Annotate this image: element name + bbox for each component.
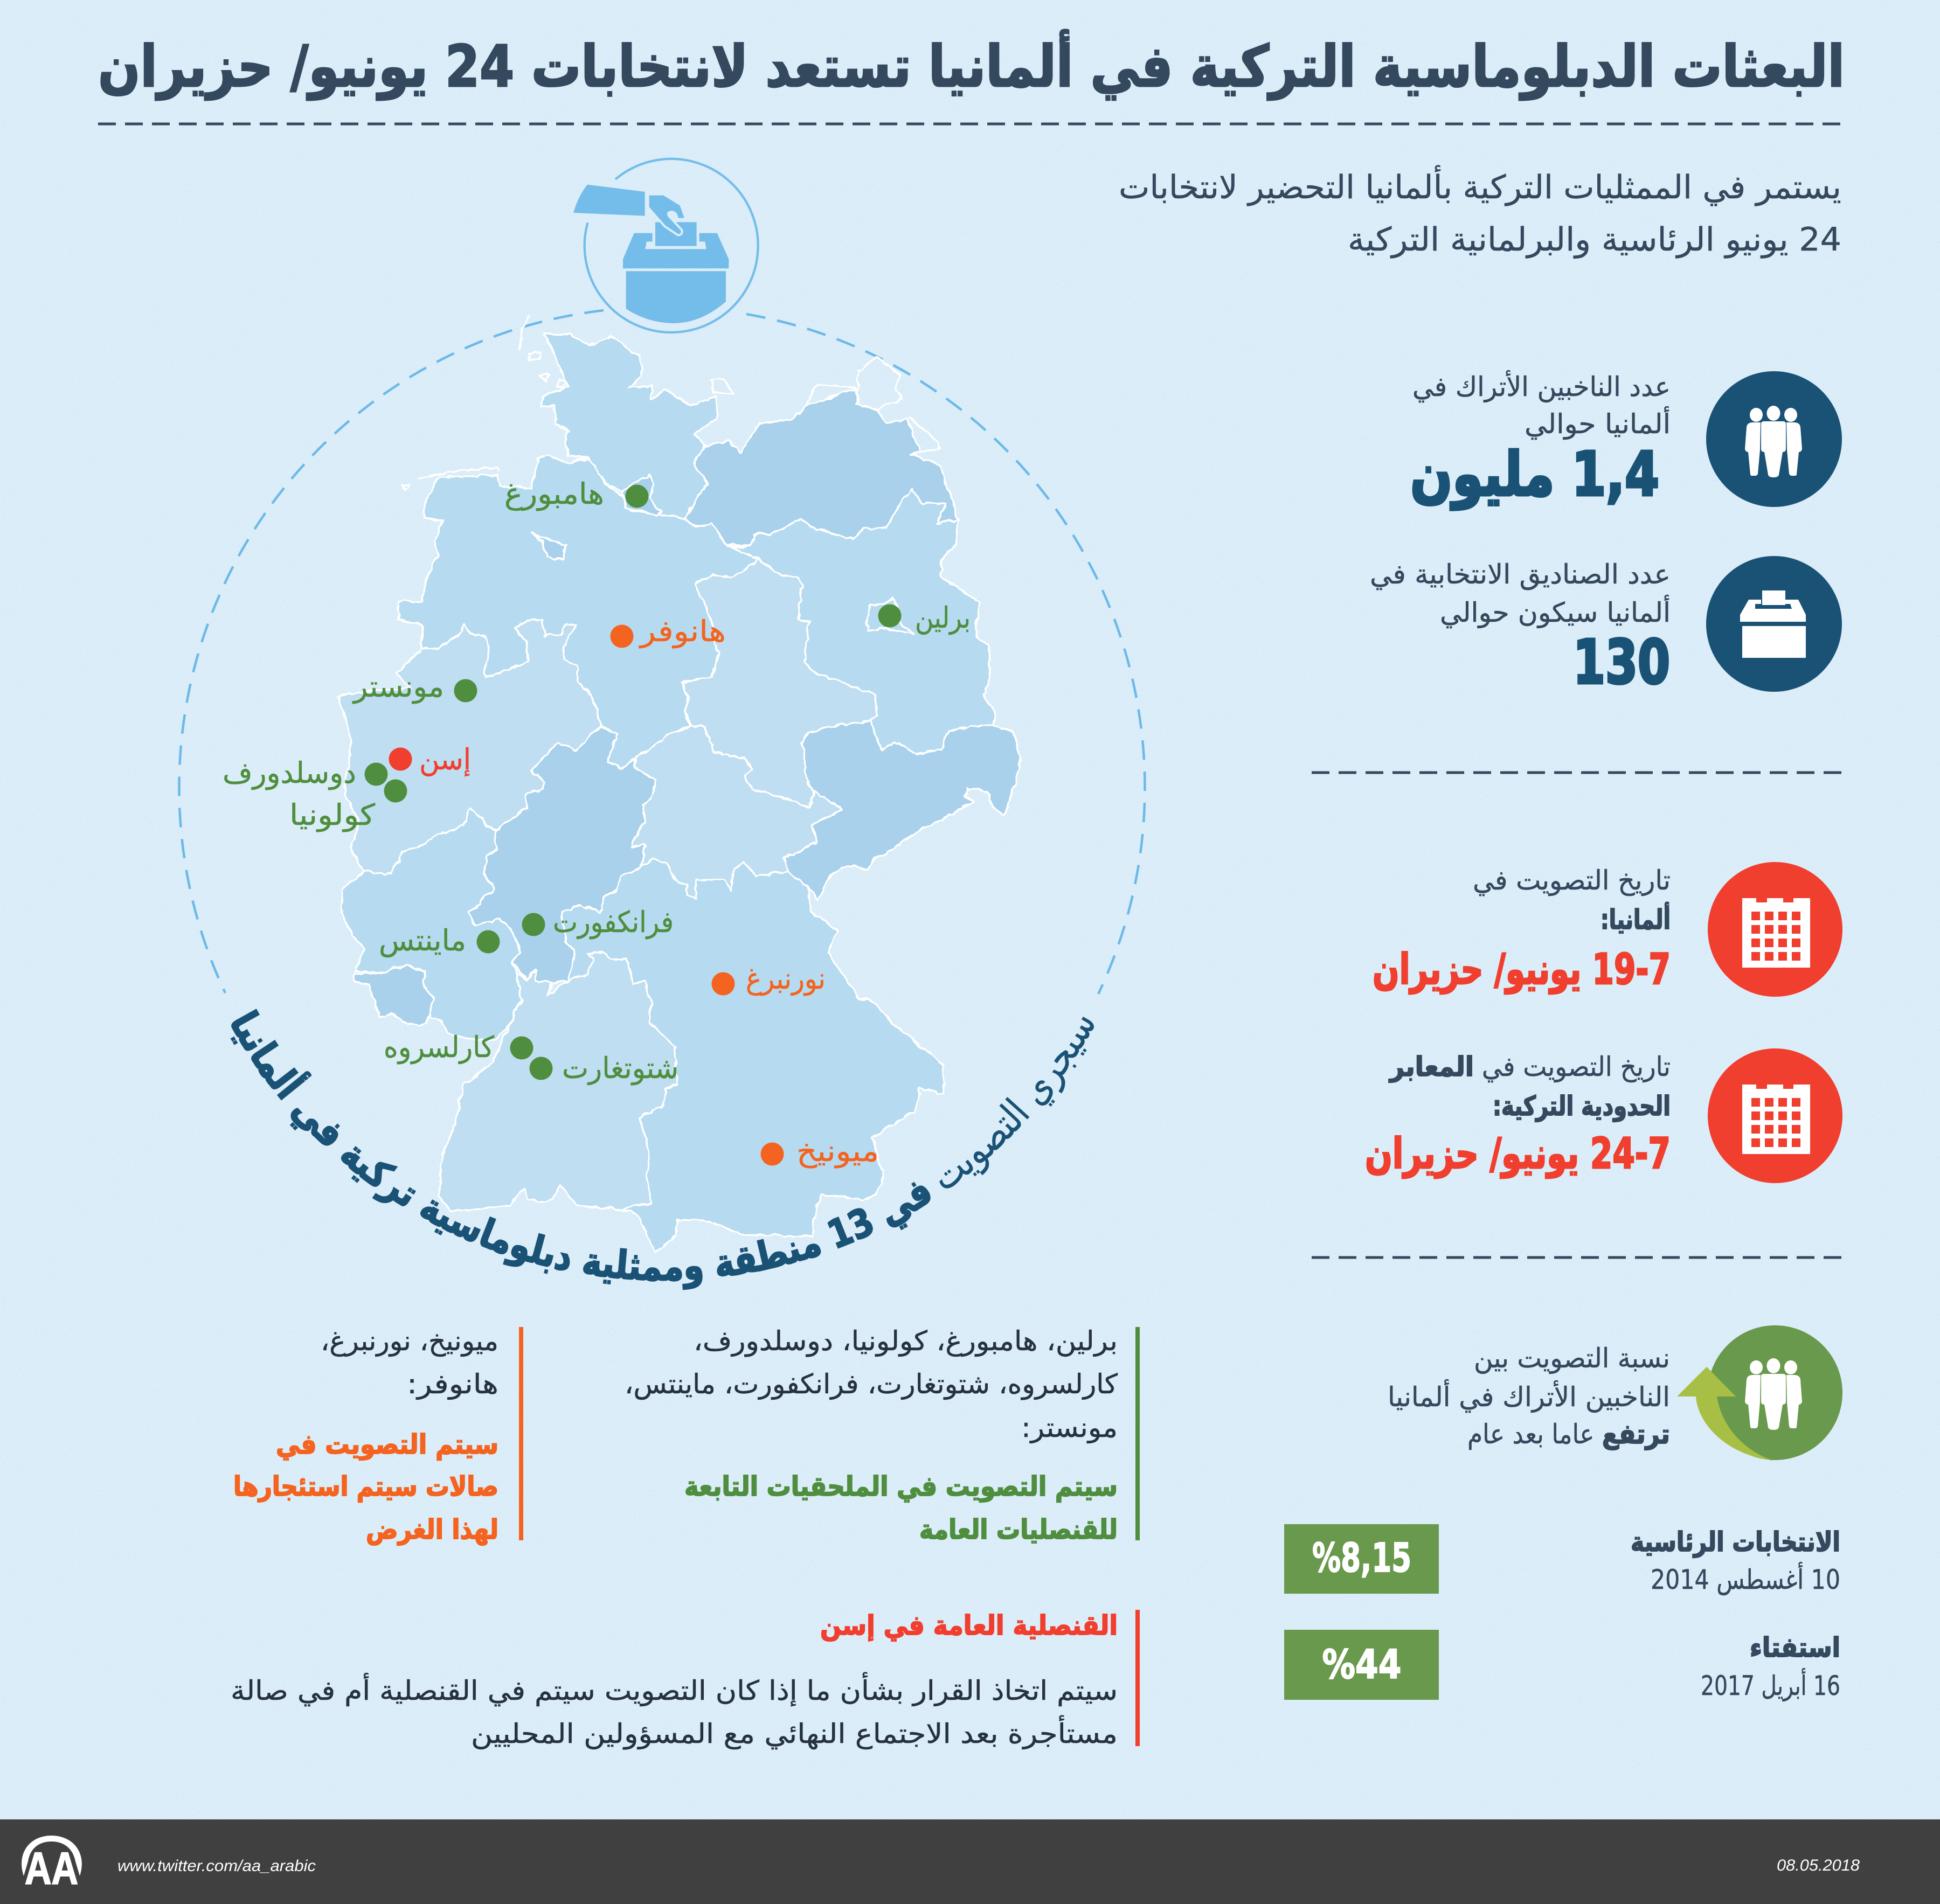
turnout row: presidential: 10 أغسطس 2014 bbox=[1651, 1562, 1840, 1595]
Lower Saxony bbox=[398, 454, 757, 767]
voting date: Germany: تاريخ التصويت في bbox=[1473, 865, 1671, 897]
note: Essen consulate (red): مستأجرة بعد الاجتماع النهائي مع المسؤولين المحليين bbox=[471, 1715, 1118, 1750]
city: Essen: إسن bbox=[419, 742, 471, 776]
note: annexes (green) bbox=[625, 1325, 1140, 1545]
intro text: 24 يونيو الرئاسية والبرلمانية التركية bbox=[1348, 221, 1841, 259]
city: Frankfurt: فرانكفورت bbox=[553, 905, 674, 939]
note: annexes (green): للقنصليات العامة bbox=[919, 1514, 1118, 1545]
note: annexes (green): مونستر: bbox=[1021, 1412, 1118, 1443]
note: annexes (green): سيتم التصويت في الملحقيات التابعة bbox=[684, 1471, 1118, 1503]
city: Essen bbox=[389, 742, 471, 776]
Bavaria bbox=[560, 857, 943, 1250]
North Rhine-Westphalia bbox=[337, 618, 599, 873]
Hamburg bbox=[620, 474, 660, 515]
city: Berlin bbox=[878, 601, 971, 635]
northern islands bbox=[400, 314, 938, 490]
Mecklenburg-Vorpommern bbox=[683, 387, 957, 545]
city: Hannover bbox=[610, 614, 726, 648]
note: rented halls (orange): سيتم التصويت في bbox=[276, 1429, 498, 1461]
footer: 08.05.2018 bbox=[1777, 1857, 1860, 1874]
note: rented halls (orange): لهذا الغرض bbox=[366, 1514, 498, 1546]
note: rented halls (orange): صالات سيتم استئجارها bbox=[233, 1471, 498, 1502]
turnout section: الناخبين الأتراك في ألمانيا bbox=[1388, 1379, 1670, 1413]
Saarland bbox=[354, 963, 432, 1024]
Saxony bbox=[782, 720, 1020, 898]
Thuringia bbox=[629, 725, 841, 898]
note: annexes (green): برلين، هامبورغ، كولونيا، دوسلدورف، bbox=[694, 1325, 1118, 1357]
footer bbox=[0, 1819, 1940, 1904]
intro text bbox=[1119, 165, 1841, 259]
Saxony-Anhalt bbox=[681, 558, 876, 807]
Hesse bbox=[467, 725, 655, 981]
turnout section: نسبة التصويت بين bbox=[1474, 1343, 1670, 1374]
city: Berlin: برلين bbox=[915, 601, 971, 635]
turnout row: referendum: 16 أبريل 2017 bbox=[1701, 1668, 1840, 1701]
stat: ballot boxes: عدد الصناديق الانتخابية في bbox=[1370, 559, 1671, 590]
city: Mainz: ماينتس bbox=[379, 923, 466, 957]
map of Germany bbox=[337, 314, 1019, 1250]
turnout row: referendum bbox=[1284, 1630, 1840, 1701]
footer: www.twitter.com/aa_arabic bbox=[117, 1857, 316, 1875]
voting date: Germany: ألمانيا: bbox=[1600, 902, 1671, 935]
city: Nuremberg: نورنبرغ bbox=[746, 962, 826, 996]
turnout row: referendum: استفتاء bbox=[1750, 1632, 1840, 1663]
note: rented halls (orange) bbox=[233, 1325, 523, 1546]
icon: ballot box bbox=[573, 159, 758, 332]
note: rented halls (orange): ميونيخ، نورنبرغ، bbox=[321, 1325, 498, 1357]
city: Dusseldorf: دوسلدورف bbox=[223, 756, 356, 790]
intro text: يستمر في الممثليات التركية بألمانيا التحضير لانتخابات bbox=[1119, 165, 1841, 206]
Bremen bbox=[530, 533, 565, 559]
stat: ballot boxes: 130 bbox=[1573, 628, 1670, 698]
stat: ballot boxes bbox=[1370, 556, 1842, 698]
turnout row: presidential bbox=[1284, 1524, 1840, 1595]
note: Essen consulate (red) bbox=[231, 1610, 1140, 1750]
city: Cologne bbox=[289, 779, 407, 832]
voting date: border gates: الحدودية التركية: bbox=[1493, 1090, 1671, 1122]
curved caption: سيجري التصويت في 13 منطقة وممثلية دبلوماسية تركية في ألمانيا bbox=[231, 1009, 1094, 1290]
city: Hamburg: هامبورغ bbox=[504, 477, 604, 511]
city: Hannover: هانوفر bbox=[639, 614, 726, 648]
stat: voters: ألمانيا حوالي bbox=[1525, 406, 1671, 440]
stat: voters: 1,4 مليون bbox=[1410, 440, 1659, 510]
note: rented halls (orange): هانوفر: bbox=[407, 1368, 498, 1400]
Brandenburg bbox=[732, 488, 994, 753]
Rhineland-Palatinate bbox=[340, 808, 521, 1039]
stat: voters bbox=[1410, 370, 1842, 510]
turnout row: presidential: %8,15 bbox=[1312, 1535, 1411, 1581]
dashed circle around map bbox=[179, 310, 1145, 994]
stat: ballot boxes: ألمانيا سيكون حوالي bbox=[1440, 595, 1671, 628]
Schleswig-Holstein bbox=[539, 332, 716, 517]
city: Munster: مونستر bbox=[352, 670, 444, 704]
logo: AA: AA bbox=[25, 1843, 78, 1894]
stat: voters: عدد الناخبين الأتراك في bbox=[1412, 370, 1671, 402]
note: Essen consulate (red): سيتم اتخاذ القرار بشأن ما إذا كان التصويت سيتم في القنصلية أم في صالة bbox=[231, 1672, 1118, 1707]
turnout row: referendum: %44 bbox=[1322, 1642, 1401, 1688]
city: Munich: ميونيخ bbox=[796, 1134, 879, 1169]
voting date: border gates: تاريخ التصويت في المعابر bbox=[1388, 1051, 1671, 1083]
note: annexes (green): كارلسروه، شتوتغارت، فرانكفورت، ماينتس، bbox=[625, 1368, 1118, 1400]
city: Karlsruhe: كارلسروه bbox=[384, 1030, 494, 1064]
note: Essen consulate (red): القنصلية العامة في إسن bbox=[820, 1610, 1118, 1642]
voting date: Germany bbox=[1373, 862, 1842, 997]
Baden-Wurttemberg bbox=[437, 950, 676, 1210]
city: Cologne: كولونيا bbox=[289, 798, 375, 832]
turnout section: ترتفع عاما بعد عام bbox=[1467, 1419, 1670, 1450]
Berlin bbox=[866, 596, 912, 632]
city: Munich bbox=[761, 1134, 879, 1169]
turnout row: presidential: الانتخابات الرئاسية bbox=[1631, 1526, 1840, 1558]
voting date: Germany: 19-7 يونيو/ حزيران bbox=[1373, 946, 1671, 994]
city: Nuremberg bbox=[711, 962, 826, 996]
city: Hamburg bbox=[504, 477, 649, 511]
city: Stuttgart: شتوتغارت bbox=[562, 1051, 678, 1085]
voting date: border gates bbox=[1365, 1048, 1842, 1183]
turnout section bbox=[1388, 1325, 1842, 1461]
voting date: border gates: 24-7 يونيو/ حزيران bbox=[1365, 1130, 1671, 1178]
